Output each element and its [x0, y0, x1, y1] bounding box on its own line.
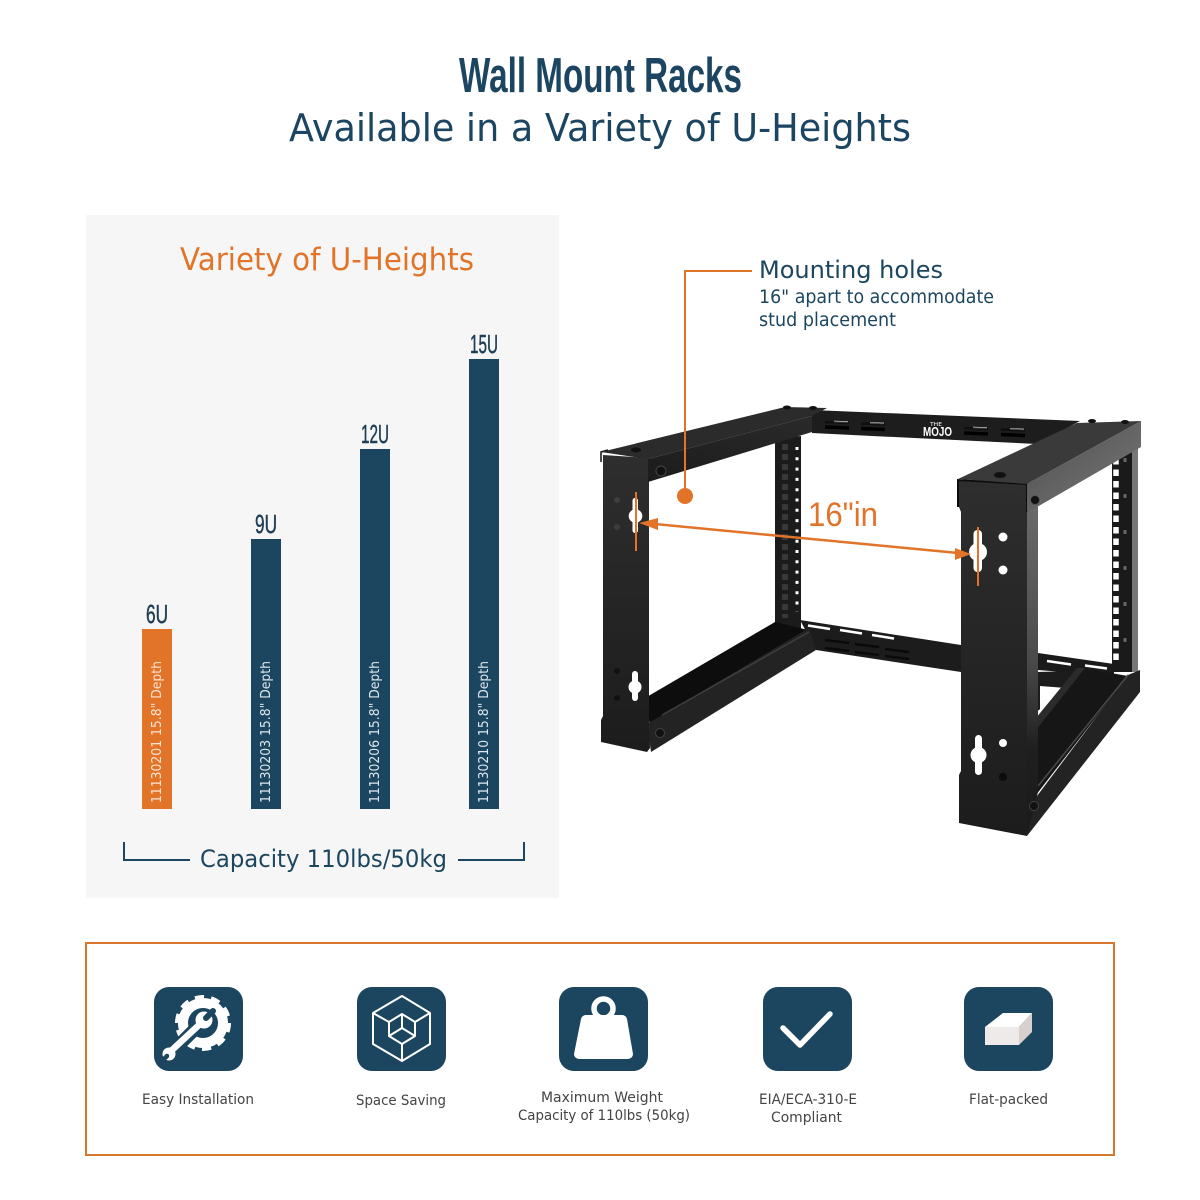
bar: 6U	[142, 599, 172, 809]
bar: 12U	[360, 419, 390, 809]
panel: features	[86, 943, 1114, 1155]
logo: THE	[929, 422, 942, 428]
right front post	[958, 480, 1038, 836]
feature: maximum weight: Capacity of 110lbs (50kg)	[518, 1108, 690, 1124]
bar: 12U: 12U	[361, 419, 389, 449]
icon: flat box	[964, 987, 1053, 1071]
bar: 9U	[251, 509, 281, 809]
title	[289, 49, 911, 150]
bar: 9U: 11130203 15.8" Depth	[259, 661, 274, 803]
feature: EIA compliant: EIA/ECA-310-E	[759, 1092, 857, 1108]
feature: space saving	[356, 987, 446, 1109]
rack product illustration	[601, 406, 1141, 836]
feature: EIA compliant	[759, 987, 857, 1126]
rear lower beam	[800, 620, 1114, 676]
feature: flat-packed: Flat-packed	[969, 1092, 1048, 1108]
bar: 15U: 15U	[470, 329, 498, 359]
bar chart	[142, 329, 499, 809]
feature: space saving: Space Saving	[356, 1093, 446, 1109]
callout: mounting holes: stud placement	[759, 310, 896, 331]
keyhole: upper right	[969, 530, 987, 572]
keyhole: lower right	[970, 735, 986, 775]
dimension arrow: 16 in: 16"in	[808, 496, 878, 534]
left front post	[601, 450, 650, 752]
feature: EIA compliant: Compliant	[771, 1110, 842, 1126]
dimension arrow: 16 in	[636, 492, 978, 586]
callout: mounting holes: Mounting holes	[759, 256, 943, 284]
icon: gear and wrench	[154, 987, 243, 1071]
bar: 6U: 6U	[146, 599, 168, 629]
rear left upright	[775, 436, 801, 630]
callout: mounting holes: 16" apart to accommodate	[759, 287, 994, 308]
title: Available in a Variety of U-Heights	[289, 106, 911, 150]
panel heading: Variety of U-Heights	[180, 242, 474, 278]
rear right upright	[1112, 447, 1138, 672]
icon: cube	[357, 987, 446, 1071]
feature: maximum weight: Maximum Weight	[541, 1090, 663, 1106]
title: Wall Mount Racks	[459, 49, 742, 103]
callout: mounting holes	[677, 256, 994, 504]
right top beam	[958, 419, 1141, 512]
icon: weight	[559, 987, 648, 1071]
feature: easy installation	[142, 987, 254, 1108]
panel: variety of U-heights	[86, 215, 559, 898]
icon: check mark	[763, 987, 852, 1071]
bar: 6U: 11130201 15.8" Depth	[150, 661, 165, 803]
right lower rail	[1027, 668, 1140, 836]
capacity bracket	[124, 842, 524, 873]
bar: 15U	[469, 329, 499, 809]
keyhole: upper left	[629, 498, 642, 533]
feature: easy installation: Easy Installation	[142, 1092, 254, 1108]
logo: MOJO	[923, 424, 952, 439]
feature: flat-packed	[964, 987, 1053, 1108]
bar: 12U: 11130206 15.8" Depth	[368, 661, 383, 803]
left lower rail	[645, 622, 816, 752]
rear top beam	[812, 410, 1080, 444]
feature: maximum weight	[518, 987, 690, 1124]
bar: 9U: 9U	[255, 509, 277, 539]
bar: 15U: 11130210 15.8" Depth	[477, 661, 492, 803]
capacity bracket: Capacity 110lbs/50kg	[200, 845, 447, 873]
left top beam	[601, 406, 827, 482]
keyhole: lower left	[628, 671, 642, 701]
logo	[923, 422, 952, 439]
